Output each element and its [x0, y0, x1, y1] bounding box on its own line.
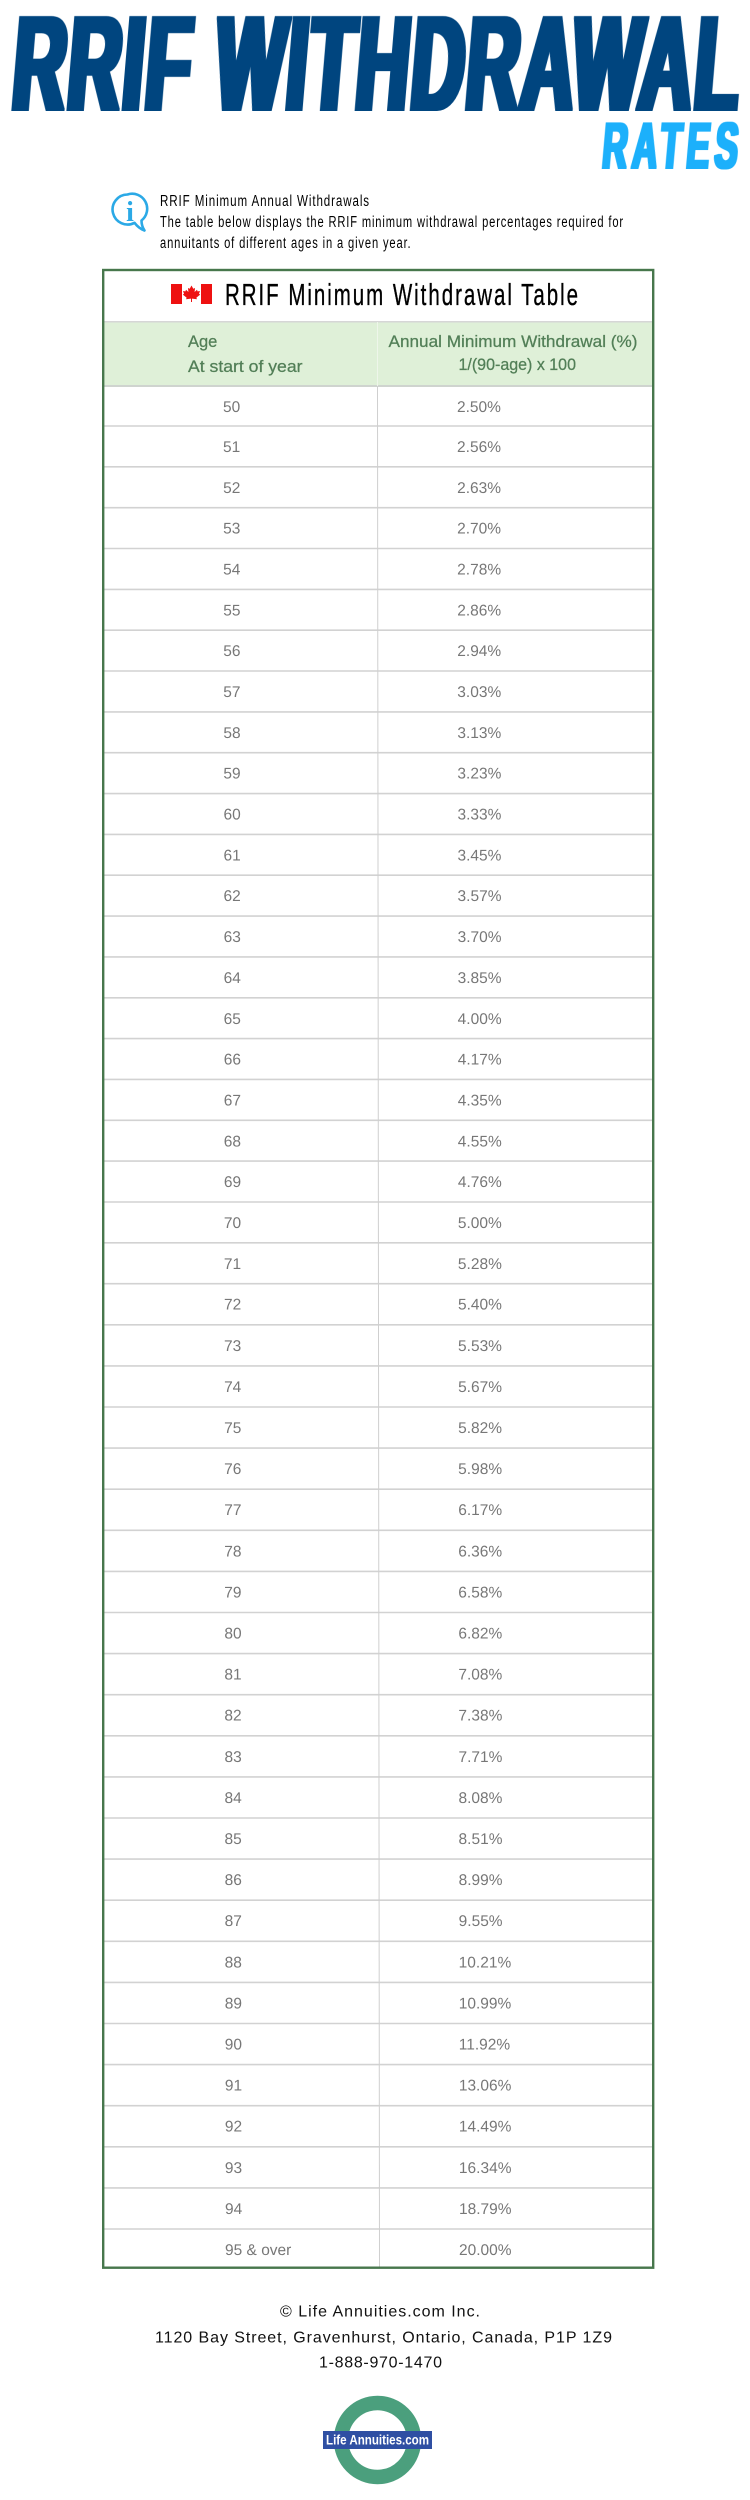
table rows [223, 399, 512, 2259]
row: age 91 [225, 2078, 512, 2095]
row: age 60: 3.33% [457, 807, 502, 824]
row: age 95 and over [225, 2242, 512, 2259]
row: age 73 [224, 1338, 502, 1355]
row: age 77 [224, 1502, 502, 1519]
row: age 65: 4.00% [458, 1011, 502, 1028]
row: age 94: 18.79% [459, 2201, 512, 2218]
row: age 61 [223, 847, 502, 864]
row: age 95 and over: 20.00% [459, 2242, 512, 2259]
row: age 74: 74 [224, 1379, 242, 1396]
logo: Life Annuities.com [323, 2403, 432, 2477]
row: age 72: 72 [224, 1297, 241, 1314]
row: age 87: 9.55% [459, 1913, 503, 1930]
row: age 78: 78 [224, 1543, 241, 1560]
row: age 51: 51 [223, 439, 240, 456]
row: age 91: 91 [225, 2078, 242, 2095]
row: age 53: 2.70% [457, 521, 501, 538]
row: age 52: 52 [223, 480, 240, 497]
row: age 69: 69 [224, 1174, 241, 1191]
row: age 66: 4.17% [458, 1052, 502, 1069]
row: age 86: 86 [225, 1872, 242, 1889]
row: age 81 [224, 1667, 503, 1684]
row: age 72: 5.40% [458, 1297, 502, 1314]
row: age 63: 3.70% [458, 929, 502, 946]
row: age 58: 58 [223, 725, 241, 742]
row: age 93 [225, 2160, 512, 2177]
row: age 85: 85 [225, 1831, 242, 1848]
table heading with flag [171, 277, 580, 312]
row: age 68: 68 [224, 1133, 241, 1150]
row: age 59 [223, 766, 502, 783]
table header row: At start of year [188, 358, 303, 376]
row: age 78: 6.36% [458, 1543, 502, 1560]
row: age 70 [224, 1215, 502, 1232]
table header row [104, 321, 652, 387]
row: age 51 [223, 439, 501, 456]
row: age 85 [225, 1831, 503, 1848]
row: age 65 [224, 1011, 502, 1028]
row: age 64 [224, 970, 502, 987]
row: age 90 [225, 2036, 510, 2054]
row: age 81: 81 [224, 1667, 242, 1684]
row: age 87: 87 [225, 1913, 242, 1930]
row: age 80: 6.82% [458, 1626, 503, 1642]
row: age 70: 70 [224, 1215, 242, 1232]
row: age 71: 5.28% [458, 1256, 502, 1273]
row: age 67 [224, 1092, 502, 1109]
intro text block: RRIF Minimum Annual Withdrawals [160, 193, 370, 210]
row: age 88 [225, 1954, 511, 1971]
row: age 79: 79 [224, 1584, 242, 1601]
row: age 82: 82 [224, 1708, 242, 1725]
row: age 75: 75 [224, 1420, 241, 1437]
row: age 84: 8.08% [458, 1790, 503, 1807]
row: age 66 [224, 1052, 502, 1069]
row: age 90: 90 [225, 2036, 242, 2053]
row: age 76: 5.98% [458, 1461, 502, 1478]
row: age 83: 7.71% [458, 1749, 503, 1766]
row: age 69 [224, 1174, 502, 1191]
footer contact text [155, 2304, 612, 2372]
table header row: Annual Minimum Withdrawal (%) [388, 333, 638, 351]
row: age 62 [224, 888, 502, 905]
row: age 95 and over: 95 & over [225, 2242, 291, 2259]
table outer border [103, 270, 653, 2268]
row: age 75: 5.82% [458, 1420, 502, 1437]
row: age 92: 14.49% [459, 2119, 512, 2136]
row: age 53: 53 [223, 521, 240, 538]
row: age 86 [225, 1872, 503, 1889]
row: age 59: 3.23% [457, 766, 502, 783]
row: age 78 [224, 1543, 502, 1560]
row: age 63 [224, 929, 502, 946]
footer contact text: © Life Annuities.com Inc. [280, 2304, 480, 2320]
row: age 80: 80 [224, 1626, 242, 1642]
row: age 86: 8.99% [459, 1872, 503, 1889]
row: age 68 [224, 1133, 502, 1150]
row: age 80 [224, 1626, 503, 1642]
row: age 83 [224, 1749, 503, 1766]
row: age 87 [225, 1913, 503, 1930]
row: age 94 [225, 2201, 512, 2218]
table header row: Age [188, 333, 217, 351]
row: age 75 [224, 1420, 502, 1437]
row: age 76 [224, 1461, 502, 1478]
row: age 58 [223, 725, 502, 742]
row: age 56 [223, 643, 501, 660]
row: age 62: 62 [224, 888, 241, 905]
row: age 69: 4.76% [458, 1174, 502, 1191]
row: age 93: 93 [225, 2160, 242, 2177]
row: age 50: 2.50% [457, 399, 501, 416]
logo: Life Annuities.com: Life Annuities.com [326, 2432, 429, 2448]
row: age 56: 2.94% [457, 643, 501, 660]
row: age 72 [224, 1297, 502, 1314]
row: age 89: 10.99% [459, 1995, 512, 2012]
row: age 64: 64 [224, 970, 241, 987]
row: age 79 [224, 1584, 502, 1601]
row: age 61: 3.45% [457, 847, 502, 864]
row: age 59: 59 [223, 766, 241, 783]
row: age 89: 89 [225, 1995, 242, 2012]
row: age 64: 3.85% [458, 970, 502, 987]
row: age 82 [224, 1708, 503, 1725]
row: age 55: 55 [223, 602, 240, 619]
icon: info speech bubble [113, 194, 147, 230]
row: age 76: 76 [224, 1461, 241, 1478]
row: age 92 [225, 2119, 512, 2136]
row: age 90: 11.92% [459, 2036, 510, 2053]
row: age 52 [223, 480, 501, 497]
row: age 67: 4.35% [458, 1092, 502, 1109]
row: age 71 [224, 1256, 502, 1273]
subtitle: rates: RATES [600, 111, 747, 183]
row: age 88: 88 [225, 1954, 242, 1971]
row: age 50: 50 [223, 399, 241, 416]
row: age 88: 10.21% [459, 1954, 511, 1971]
row: age 68: 4.55% [458, 1133, 502, 1150]
row: age 54 [223, 562, 501, 578]
icon: info speech bubble: i [126, 197, 134, 228]
row: age 93: 16.34% [459, 2160, 512, 2177]
row: age 73: 73 [224, 1338, 241, 1355]
footer contact text: 1120 Bay Street, Gravenhurst, Ontario, Canada, P1P 1Z9 [155, 2330, 612, 2346]
row: age 51: 2.56% [457, 439, 501, 456]
table header row: 1/(90-age) x 100 [458, 356, 576, 374]
row: age 52: 2.63% [457, 480, 501, 497]
row: age 89 [225, 1995, 512, 2012]
row: age 58: 3.13% [457, 725, 502, 742]
row: age 60: 60 [223, 807, 241, 824]
row: age 61: 61 [223, 847, 241, 864]
row: age 83: 83 [224, 1749, 242, 1766]
row: age 65: 65 [224, 1011, 241, 1028]
row: age 60 [223, 807, 502, 824]
row: age 70: 5.00% [458, 1215, 502, 1232]
row: age 50 [223, 399, 501, 416]
row: age 74: 5.67% [458, 1379, 502, 1396]
row: age 55: 2.86% [457, 602, 501, 619]
footer contact text: 1-888-970-1470 [319, 2354, 442, 2372]
row: age 92: 92 [225, 2119, 242, 2136]
row: age 66: 66 [224, 1052, 241, 1069]
row: age 57 [223, 684, 501, 701]
intro text block [160, 193, 624, 252]
row: age 63: 63 [224, 929, 241, 946]
row: age 54: 54 [223, 562, 241, 578]
icon: Canadian flag [171, 284, 212, 304]
row: age 57: 57 [223, 684, 241, 701]
row: age 54: 2.78% [457, 562, 501, 578]
row: age 94: 94 [225, 2201, 243, 2218]
row: age 53 [223, 521, 501, 538]
table grid lines [104, 386, 652, 2267]
row: age 91: 13.06% [459, 2078, 512, 2095]
row: age 77: 6.17% [458, 1502, 502, 1519]
row: age 84: 84 [224, 1790, 242, 1807]
row: age 84 [224, 1790, 503, 1807]
row: age 79: 6.58% [458, 1584, 502, 1601]
row: age 82: 7.38% [458, 1708, 503, 1725]
row: age 67: 67 [224, 1092, 241, 1109]
intro text block: annuitants of different ages in a given year. [160, 235, 412, 252]
row: age 56: 56 [223, 643, 241, 660]
row: age 71: 71 [224, 1256, 241, 1273]
row: age 85: 8.51% [459, 1831, 503, 1848]
row: age 73: 5.53% [458, 1338, 502, 1355]
row: age 81: 7.08% [458, 1667, 503, 1684]
panel: withdrawal table [103, 270, 653, 2268]
table heading with flag: RRIF Minimum Withdrawal Table [225, 277, 580, 312]
row: age 62: 3.57% [458, 888, 502, 905]
row: age 55 [223, 602, 501, 619]
row: age 57: 3.03% [457, 684, 501, 701]
row: age 77: 77 [224, 1502, 241, 1519]
row: age 74 [224, 1379, 502, 1396]
